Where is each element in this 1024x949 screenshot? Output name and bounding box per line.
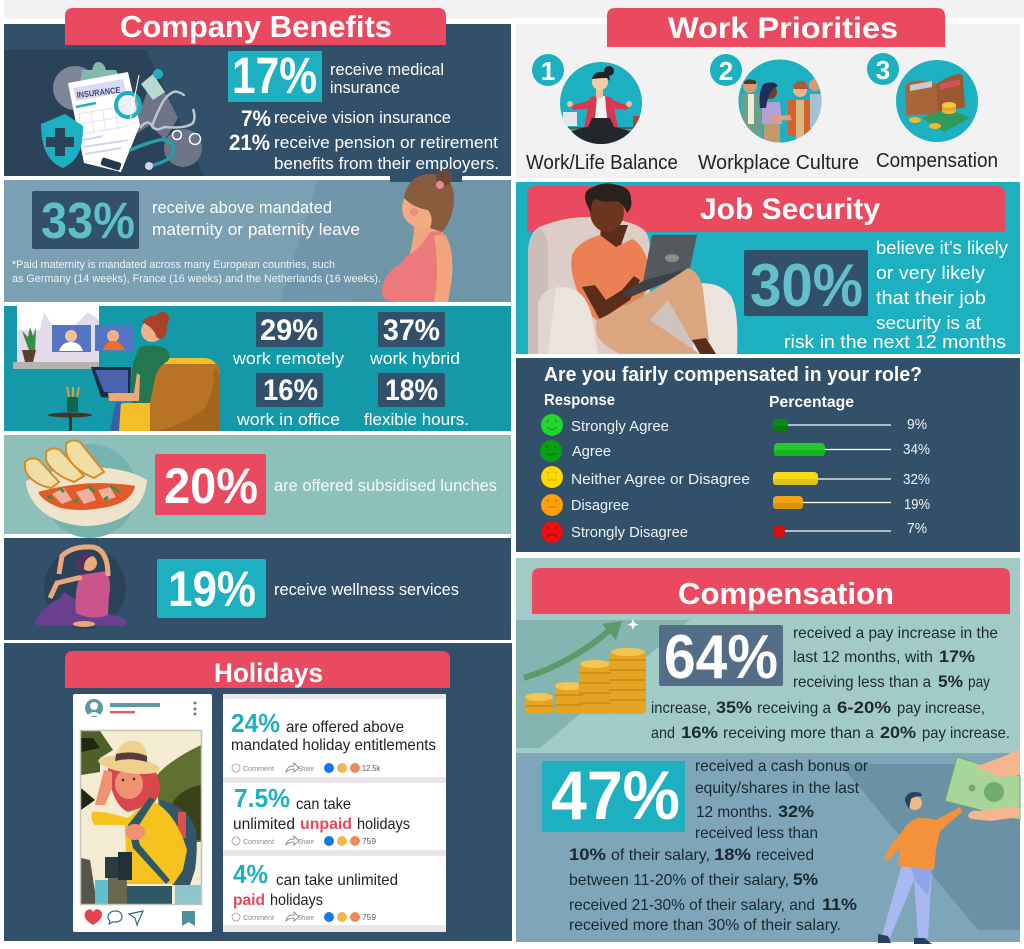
stat: 17 percent medical insurance: receive medical [330,60,444,79]
text block: cash bonus: 5% [793,870,818,889]
post: 4 percent: 4% [233,859,268,889]
text block: cash bonus: received [756,847,814,864]
stat: work remotely: 29% [260,314,318,347]
stat: vision and pension: receive vision insurance [274,108,451,127]
text block: pay increase: last 12 months, with [793,649,933,666]
text block: pay increase: pay increase. [922,725,1010,742]
text block: cash bonus: 18% [714,845,751,864]
icon: heart [85,909,102,925]
header: job security [527,186,1005,232]
row: strongly agree: 9% [907,416,927,433]
post: 7.5 percent: Comment [243,837,275,846]
text block: cash bonus: 10% [569,845,606,864]
icon: comment [108,911,122,924]
row: neither agree or disagree [541,466,930,488]
text block: pay increase: pay [968,674,990,691]
header: company benefits: Company Benefits [120,9,392,44]
post: 7.5 percent: 759 [362,837,377,846]
stat: work hybrid: work hybrid [369,349,460,368]
panel: job security [516,182,1020,354]
panel: maternity leave: 33% [41,192,135,249]
text block: cash bonus: equity/shares in the last [695,780,860,797]
icon: bookmark [182,911,195,926]
panel: fair compensation survey [516,358,1020,552]
stat: work remotely: work remotely [232,349,345,368]
stat: 17 percent medical insurance: 17% [232,47,317,104]
post: 4 percent: paid [233,892,265,909]
text block: cash bonus [569,758,869,934]
post: 7.5 percent: can take [296,796,351,813]
panel: cash bonus: 47% [551,757,680,834]
icon: rising arrow [524,619,638,678]
text block: cash bonus: received less than [695,825,818,842]
illustration: insurance clipboard: INSURANCE [76,85,121,100]
stat: work in office: work in office [236,410,340,429]
post: 4 percent: can take unlimited [276,872,398,889]
post: 7.5 percent: Share [298,837,314,846]
number badge 1: 1 [541,56,555,86]
label: compensation: Compensation [876,150,998,172]
header: holidays: Holidays [214,658,323,688]
panel: work arrangements [4,306,511,431]
text block: cash bonus: received a cash bonus or [695,758,869,775]
illustration: man receiving money [878,749,1020,944]
label: work life balance: Work/Life Balance [526,152,678,174]
panel: compensation pay increase: 64% [664,623,778,692]
stat: work remotely [232,312,345,368]
row: agree: Agree [572,443,611,460]
panel: compensation pay increase [516,558,1020,754]
post: 4 percent: Share [298,913,314,922]
illustration: food bowl [25,440,147,538]
illustration: remote worker [13,306,220,431]
number badge 3 [867,53,899,85]
text block: pay increase: received a pay increase in the [793,625,998,642]
stat: flexible hours [364,373,469,429]
social post card with photo [73,694,212,932]
panel: job security: or very likely [876,263,985,283]
panel: wellness services [4,538,511,640]
social feed card [223,694,446,932]
row: strongly disagree: 7% [907,520,927,537]
header: work priorities [607,8,945,47]
illustration: coin stacks [525,648,646,714]
panel: work priorities [516,8,1020,178]
stat: vision and pension: 21% [229,130,270,155]
panel: job security: believe it’s likely [876,238,1008,258]
icon: send [129,911,143,925]
post: 4 percent [232,859,398,922]
stat: vision and pension: 7% [241,106,271,131]
stat: work hybrid: 37% [383,314,440,347]
row: disagree: Disagree [571,497,629,514]
number badge 1 [532,54,564,86]
text block: pay increase: pay increase, [897,700,985,717]
post: 24 percent [231,708,436,773]
post: 7.5 percent: unpaid [300,816,352,833]
text block: pay increase: 5% [938,672,963,691]
post: 7.5 percent [232,783,410,846]
post: 4 percent: holidays [270,892,323,909]
panel: job security: security is at [876,313,981,333]
stat: 17 percent medical insurance [228,47,444,104]
post: 24 percent: are offered above [286,719,404,736]
row: strongly disagree: Strongly Disagree [571,524,688,541]
illustration: yoga pose [35,547,127,629]
panel: subsidised lunches: are offered subsidised lunches [274,476,497,495]
header: compensation: Compensation [678,576,894,611]
stat: flexible hours: 18% [385,374,438,407]
panel: job security: 30% [750,252,863,319]
illustration: traveller [81,731,201,904]
panel: fair compensation survey: Response [544,392,615,409]
text block: pay increase: 35% [716,698,752,717]
post: 24 percent: 12.5k [362,764,381,773]
panel: maternity leave: receive above mandated [152,198,332,217]
text block: pay increase: receiving a [757,700,831,717]
text block: cash bonus: 32% [778,802,814,821]
stat: vision and pension: benefits from their employers. [274,154,499,173]
illustration: pregnant woman [382,170,454,302]
stat: 17 percent medical insurance: insurance [330,78,400,97]
panel: job security: risk in the next 12 months [784,332,1006,352]
row: strongly disagree [541,520,927,543]
post: 7.5 percent: unlimited [233,816,295,833]
text block: pay increase: increase, [651,700,711,717]
illustration: insurance clipboard [41,62,202,172]
text block: pay increase: receiving less than a [793,674,931,691]
panel: cash bonus [516,749,1020,944]
header: work priorities: Work Priorities [668,12,898,45]
row: neither agree or disagree: 32% [903,471,930,488]
number badge 2 [710,54,742,86]
panel: maternity leave: maternity or paternity leave [152,220,360,239]
panel: holidays [4,643,512,941]
panel: fair compensation survey: Percentage [769,394,854,411]
header: company benefits [65,8,446,45]
text block: cash bonus: between 11-20% of their salary, [569,872,789,889]
panel: maternity leave: as Germany (14 weeks), France (16 weeks) and the Netherlands (16 weeks). [12,273,381,285]
post: 24 percent: 24% [231,708,280,738]
stat: vision and pension: receive pension or retirement [274,133,498,152]
stat: work in office [236,373,340,429]
row: neither agree or disagree: Neither Agree or Disagree [571,471,750,488]
panel: maternity leave [4,170,511,302]
priority 2: workplace culture [738,60,824,144]
header: compensation [532,568,1010,614]
panel: wellness services: receive wellness services [274,580,459,599]
priority 3: compensation wallet [896,60,978,142]
text block: pay increase: receiving more than a [723,725,874,742]
panel: fair compensation survey: Are you fairly compensated in your role? [544,364,922,386]
row: agree: 34% [903,441,930,458]
stat: work in office: 16% [263,374,318,407]
illustration: man on armchair with laptop [528,183,737,354]
number badge 2: 2 [719,56,733,86]
post: 24 percent: mandated holiday entitlements [231,737,436,754]
text block: pay increase: 20% [880,723,916,742]
row: agree [540,440,930,462]
priority 1: work life balance [560,62,642,145]
text block: cash bonus: received 21-30% of their salary, and [569,897,815,914]
panel: job security: that their job [876,288,986,308]
panel: company benefits insurance [4,24,511,176]
text block: pay increase [651,625,1010,742]
panel: subsidised lunches: 20% [164,458,258,514]
text block: cash bonus: received more than 30% of their salary. [569,917,841,934]
text block: pay increase: 6-20% [837,698,891,717]
text block: pay increase: 17% [939,647,975,666]
stat: work hybrid [369,312,460,368]
row: strongly agree [541,414,927,436]
text block: pay increase: 16% [681,723,718,742]
row: disagree: 19% [904,496,930,513]
text block: cash bonus: of their salary, [611,847,710,864]
text block: cash bonus: 12 months. [696,804,772,821]
post: 24 percent: Share [298,764,314,773]
row: strongly agree: Strongly Agree [571,418,669,435]
stat: flexible hours: flexible hours. [364,410,469,429]
header: holidays [65,651,450,688]
post: 4 percent: 759 [362,913,377,922]
row: disagree [541,494,930,516]
panel: subsidised lunches [4,435,511,538]
panel: maternity leave: *Paid maternity is mandated across many European countries, such [12,259,335,271]
post: 4 percent: Comment [243,913,275,922]
post: 7.5 percent: 7.5% [234,783,290,813]
text block: cash bonus: 11% [822,895,857,914]
label: workplace culture: Workplace Culture [698,152,859,174]
post: 7.5 percent: holidays [357,816,410,833]
post: 24 percent: Comment [243,764,275,773]
stat: vision and pension [229,106,499,173]
header: job security: Job Security [700,193,880,226]
text block: pay increase: and [651,725,675,742]
number badge 3: 3 [876,55,890,85]
panel: wellness services: 19% [168,561,256,617]
